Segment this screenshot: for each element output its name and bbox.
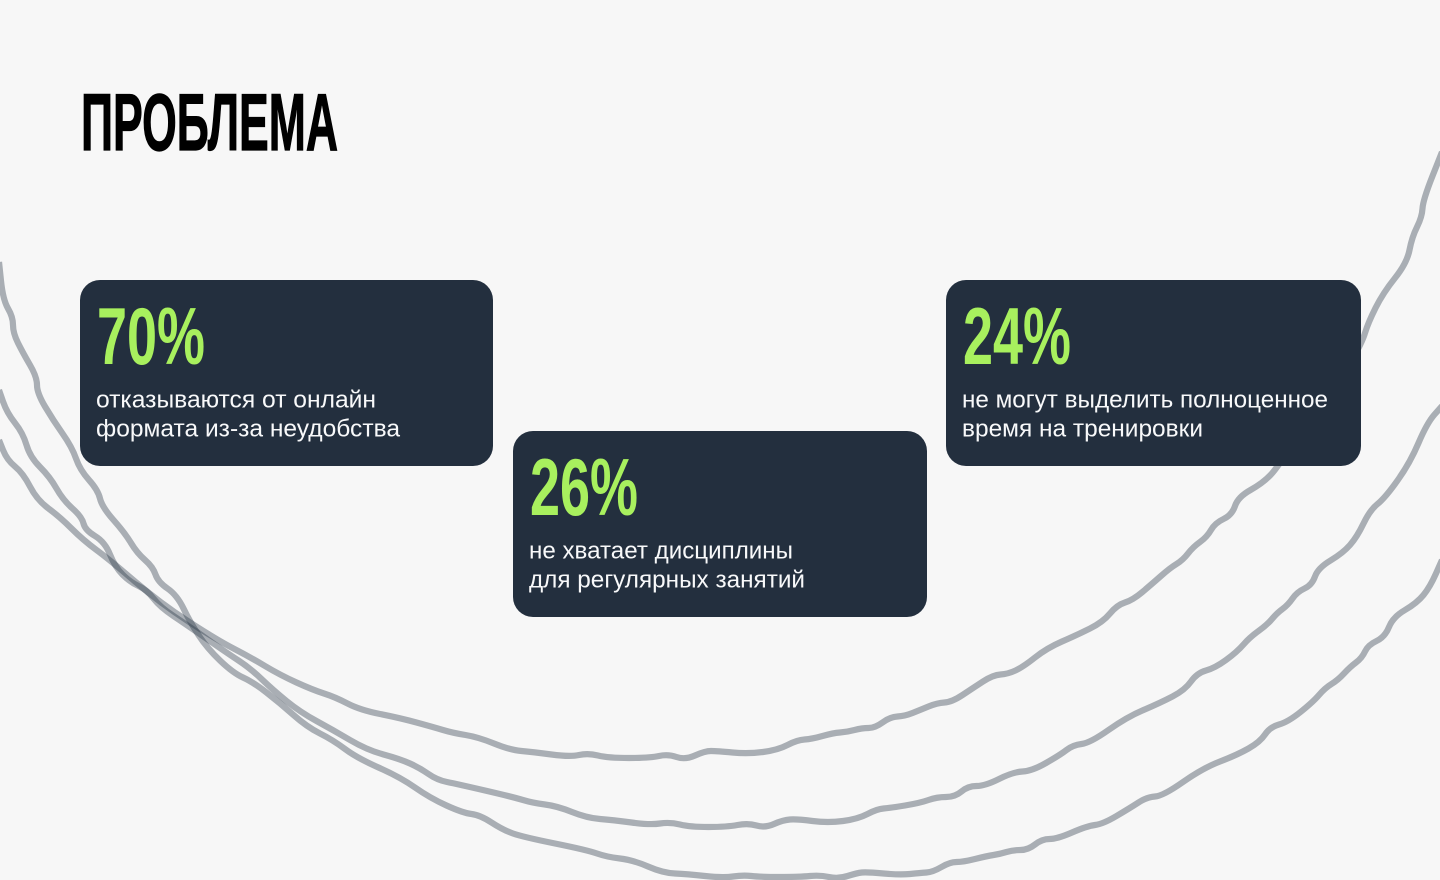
stat description: training time: время на тренировки (962, 416, 1203, 442)
stat description: online format: отказываются от онлайн (96, 386, 376, 414)
stat description: discipline: для регулярных занятий (529, 566, 805, 594)
stat description: online format: формата из-за неудобства (96, 416, 401, 442)
stat number: 26%: 26% (530, 443, 638, 533)
panel: 26% statistic (513, 431, 927, 617)
stat description: discipline (529, 538, 805, 594)
wavy line: middle curve (0, 390, 1440, 827)
stat description: online format (96, 386, 401, 442)
panel: 70% statistic (80, 280, 493, 466)
wavy line: outer curve (0, 262, 1440, 878)
stat description: training time: не могут выделить полноценное (962, 386, 1328, 414)
panel: 24% statistic (946, 280, 1361, 466)
stat number: 24%: 24% (963, 292, 1071, 382)
stat description: training time (962, 386, 1328, 442)
stat description: discipline: не хватает дисциплины (529, 538, 793, 564)
stat number: 70%: 70% (97, 292, 205, 382)
wavy line: inner curve (0, 152, 1440, 758)
title: ПРОБЛЕМА (81, 78, 338, 168)
